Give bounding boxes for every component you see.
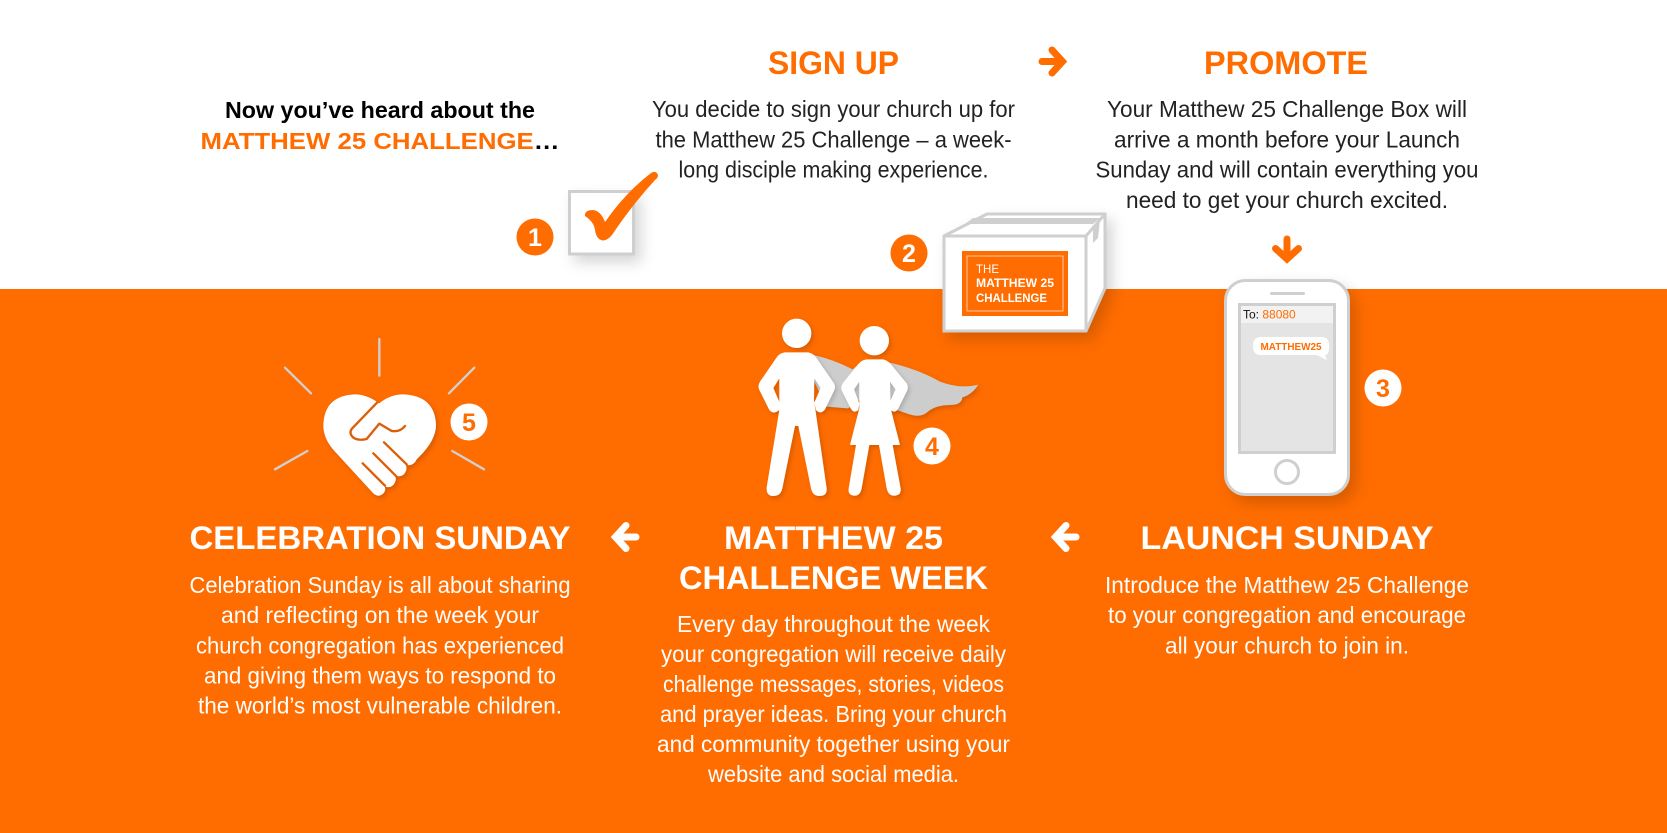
promote text: arrive a month before your Launch (1114, 126, 1460, 152)
promote text: Your Matthew 25 Challenge Box will (1107, 96, 1467, 122)
badge 4: 4 (925, 433, 939, 461)
orange background panel (0, 289, 1667, 833)
challenge week text: and community together using your (657, 731, 1010, 757)
intro text (200, 97, 560, 154)
sign up text (652, 96, 1015, 182)
arrow: week to celebration (616, 526, 636, 548)
heading: celebration sunday: CELEBRATION SUNDAY (190, 520, 570, 556)
promote text (1096, 96, 1478, 213)
heading: challenge week (679, 520, 988, 596)
launch text (1105, 572, 1469, 658)
badge 1: 1 (528, 224, 542, 252)
celebration text: the world’s most vulnerable children. (198, 692, 562, 718)
challenge week text: challenge messages, stories, videos (663, 671, 1004, 697)
challenge week text (657, 611, 1010, 787)
message bubble: MATTHEW25 (1260, 342, 1322, 353)
celebration text: church congregation has experienced (196, 632, 564, 658)
icon: caped figures (758, 319, 978, 496)
icon: checkbox with tick (570, 172, 658, 254)
challenge week text: website and social media. (707, 761, 959, 787)
promote text: Sunday and will contain everything you (1096, 156, 1478, 182)
challenge week text: Every day throughout the week (677, 611, 990, 637)
box label: MATTHEW 25 (976, 276, 1054, 290)
celebration text: and giving them ways to respond to (204, 662, 556, 688)
box label: THE (976, 262, 999, 276)
sign up text: the Matthew 25 Challenge – a week- (656, 126, 1012, 152)
challenge week text: and prayer ideas. Bring your church (660, 701, 1007, 727)
step 1: sign up heading: SIGN UP (768, 45, 899, 81)
badge 4 (914, 428, 950, 464)
arrow: promote to launch (1276, 239, 1298, 259)
intro text: MATTHEW 25 CHALLENGE … (200, 128, 560, 154)
badge 5 (450, 404, 488, 440)
box label (962, 251, 1068, 316)
sign up text: long disciple making experience. (678, 156, 988, 182)
launch text: to your congregation and encourage (1108, 602, 1466, 628)
badge 2: 2 (902, 240, 916, 268)
heading: launch sunday: LAUNCH SUNDAY (1140, 520, 1434, 556)
badge 3: 3 (1376, 375, 1390, 403)
icon: challenge box (944, 214, 1105, 331)
sign up text: You decide to sign your church up for (652, 96, 1015, 122)
box label: CHALLENGE (976, 291, 1047, 305)
launch text: all your church to join in. (1165, 632, 1409, 658)
intro text: Now you’ve heard about the (225, 97, 535, 123)
heading: challenge week: MATTHEW 25 (724, 520, 943, 556)
badge 1 (516, 218, 554, 256)
launch text: Introduce the Matthew 25 Challenge (1105, 572, 1469, 598)
step 2: promote heading: PROMOTE (1204, 45, 1368, 81)
badge 2 (890, 234, 928, 272)
badge 5: 5 (462, 409, 476, 437)
celebration text (190, 572, 570, 718)
heading: challenge week: CHALLENGE WEEK (679, 560, 988, 596)
promote text: need to get your church excited. (1126, 187, 1448, 213)
phone recipient: To: 88080 (1243, 308, 1296, 322)
arrow: launch to week (1056, 526, 1076, 548)
celebration text: and reflecting on the week your (221, 602, 539, 628)
icon: phone (1226, 280, 1348, 494)
badge 3 (1364, 370, 1402, 406)
challenge week text: your congregation will receive daily (661, 641, 1006, 667)
message bubble (1253, 337, 1329, 360)
celebration text: Celebration Sunday is all about sharing (190, 572, 570, 598)
icon: handshake heart with rays (275, 339, 484, 496)
arrow: sign up to promote (1042, 50, 1062, 73)
